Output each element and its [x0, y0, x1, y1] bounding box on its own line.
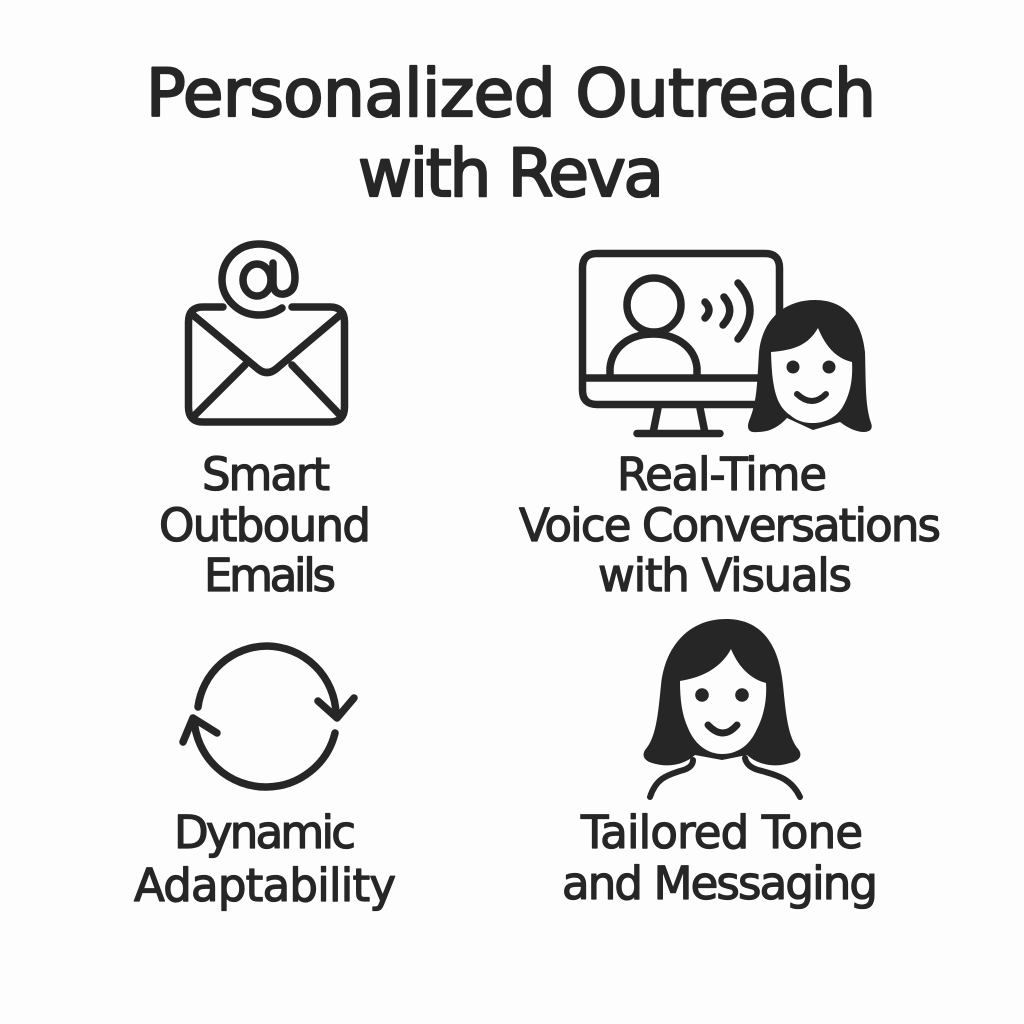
label: tailored tone and messaging: and Messaging — [562, 857, 878, 910]
label: dynamic adaptability: Adaptability — [134, 859, 396, 912]
icon: email envelope with at sign — [188, 244, 344, 422]
label: smart outbound emails: Outbound — [159, 499, 371, 552]
label: real-time voice conversations with visuals — [519, 448, 941, 602]
label: tailored tone and messaging: Tailored Tone — [580, 806, 863, 859]
title: with Reva — [358, 135, 664, 212]
title: Personalized Outreach — [146, 55, 876, 132]
label: smart outbound emails: Smart — [202, 448, 330, 501]
label: dynamic adaptability — [134, 806, 396, 912]
title — [146, 55, 876, 212]
label: smart outbound emails: Emails — [204, 549, 336, 602]
label: real-time voice conversations with visuals: Real-Time — [617, 448, 827, 501]
icon: monitor with voice and avatar — [582, 254, 872, 434]
label: real-time voice conversations with visuals: Voice Conversations — [519, 499, 941, 552]
label: real-time voice conversations with visuals: with Visuals — [598, 549, 852, 602]
label: tailored tone and messaging — [562, 806, 878, 910]
label: dynamic adaptability: Dynamic — [174, 806, 356, 859]
icon: circular arrows — [183, 646, 354, 787]
avatar on monitor — [748, 300, 872, 432]
icon: woman avatar — [644, 619, 800, 797]
label: smart outbound emails — [159, 448, 371, 602]
